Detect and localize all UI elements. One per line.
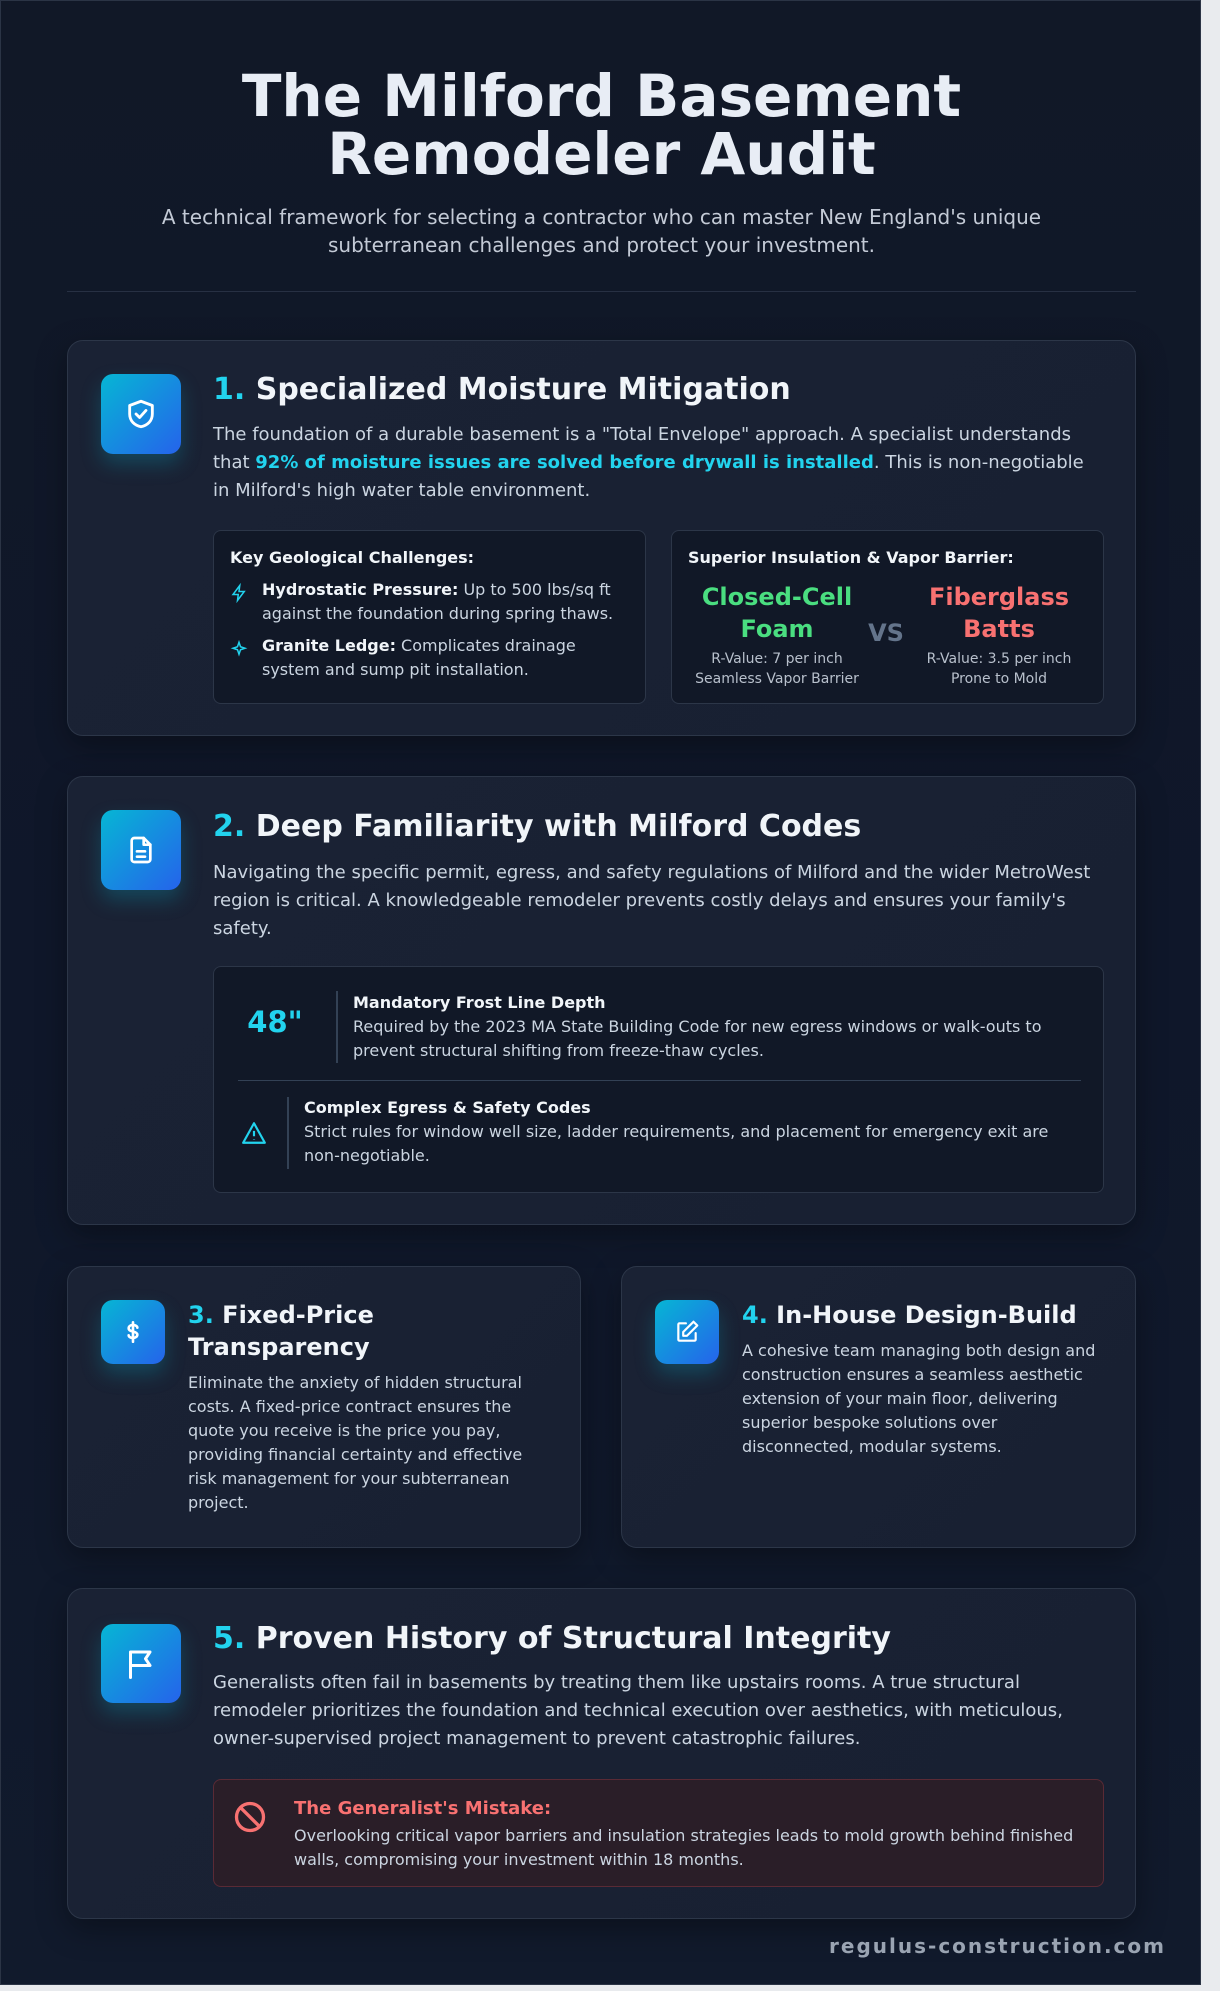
heading	[188, 1301, 374, 1361]
box: code facts: Strict rules for window well size, ladder requirements, and placement for emergency exit are non-negotiable.	[304, 1122, 1048, 1165]
box: geological challenges: Hydrostatic Pressure: Up to 500 lbs/sq ft against the foundation during spring thaws.	[262, 580, 613, 623]
callout: generalist's mistake: The Generalist's Mistake:	[294, 1798, 551, 1819]
footer url: regulus-construction.com	[829, 1934, 1166, 1958]
icon: edit	[655, 1300, 719, 1364]
box: geological challenges: Granite Ledge: Complicates drainage system and sump pit installation.	[262, 636, 576, 679]
box: insulation comparison	[671, 530, 1104, 704]
box: code facts: Required by the 2023 MA State Building Code for new egress windows or walk-outs to prevent structural shifting from freeze-thaw cycles.	[353, 1017, 1041, 1060]
icon: flag	[101, 1624, 181, 1703]
icon: bolt	[232, 583, 246, 603]
panel: 3 fixed price	[67, 1266, 581, 1548]
box: insulation comparison: Batts	[963, 615, 1035, 643]
panel: 1 moisture mitigation	[67, 340, 1136, 736]
box: insulation comparison: Foam	[740, 615, 814, 643]
heading: 3. Fixed-Price	[188, 1301, 374, 1329]
body text: Generalists often fail in basements by treating them like upstairs rooms. A true structural remodeler prioritizes the foundation and technical execution over aesthetics, with meticulous, owner-supervised project management to prevent catastrophic failures.	[213, 1672, 1063, 1749]
box: insulation comparison: R-Value: 3.5 per inch	[927, 651, 1071, 667]
heading: Transparency	[188, 1333, 370, 1361]
box: code facts	[213, 966, 1104, 1193]
panel: 5 structural integrity	[67, 1588, 1136, 1919]
box: geological challenges	[213, 530, 646, 704]
heading: 5. Proven History of Structural Integrity	[213, 1621, 891, 1656]
box: insulation comparison: Seamless Vapor Barrier	[695, 671, 859, 687]
body text: Eliminate the anxiety of hidden structural costs. A fixed-price contract ensures the quote you receive is the price you pay, providing financial certainty and effective risk management for your subterranean project.	[188, 1373, 522, 1512]
icon: warning	[242, 1122, 266, 1144]
icon: sparkle	[230, 640, 248, 656]
panel: 2 codes	[67, 776, 1136, 1225]
heading: 4. In-House Design-Build	[742, 1301, 1077, 1329]
box: code facts: Complex Egress & Safety Codes	[304, 1098, 591, 1117]
heading: 1. Specialized Moisture Mitigation	[213, 372, 791, 407]
box: insulation comparison: Fiberglass	[929, 583, 1069, 611]
box: insulation comparison: Superior Insulation & Vapor Barrier:	[688, 548, 1014, 567]
stat: 48 inches: 48"	[247, 1005, 303, 1039]
box: geological challenges: Key Geological Challenges:	[230, 548, 474, 567]
title	[242, 62, 961, 188]
box: insulation comparison: Closed-Cell	[702, 583, 852, 611]
panel: 4 design-build	[621, 1266, 1136, 1548]
icon: dollar	[101, 1300, 165, 1364]
box: insulation comparison: Prone to Mold	[951, 671, 1047, 687]
icon: document	[101, 810, 181, 890]
callout: generalist's mistake: Overlooking critical vapor barriers and insulation strategies leads to mold growth behind finished walls, compromising your investment within 18 months.	[294, 1826, 1073, 1869]
heading: 2. Deep Familiarity with Milford Codes	[213, 809, 861, 844]
icon: prohibited	[234, 1802, 266, 1832]
body text: Navigating the specific permit, egress, and safety regulations of Milford and the wider MetroWest region is critical. A knowledgeable remodeler prevents costly delays and ensures your family's safety.	[213, 862, 1090, 939]
subtitle: A technical framework for selecting a contractor who can master New England's unique subterranean challenges and protect your investment.	[162, 205, 1041, 257]
title: Remodeler Audit	[327, 120, 876, 188]
body text: The foundation of a durable basement is a "Total Envelope" approach. A specialist understands that 92% of moisture issues are solved before drywall is installed. This is non-negotiable in Milford's high water table environment.	[213, 424, 1084, 501]
icon: shield	[101, 374, 181, 454]
box: code facts: Mandatory Frost Line Depth	[353, 993, 606, 1012]
callout: generalist's mistake	[213, 1779, 1104, 1887]
body text: A cohesive team managing both design and construction ensures a seamless aesthetic extension of your main floor, delivering superior bespoke solutions over disconnected, modular systems.	[742, 1341, 1095, 1456]
box: insulation comparison: R-Value: 7 per inch	[711, 651, 843, 667]
title: The Milford Basement	[242, 62, 961, 130]
box: insulation comparison: VS	[868, 619, 904, 647]
